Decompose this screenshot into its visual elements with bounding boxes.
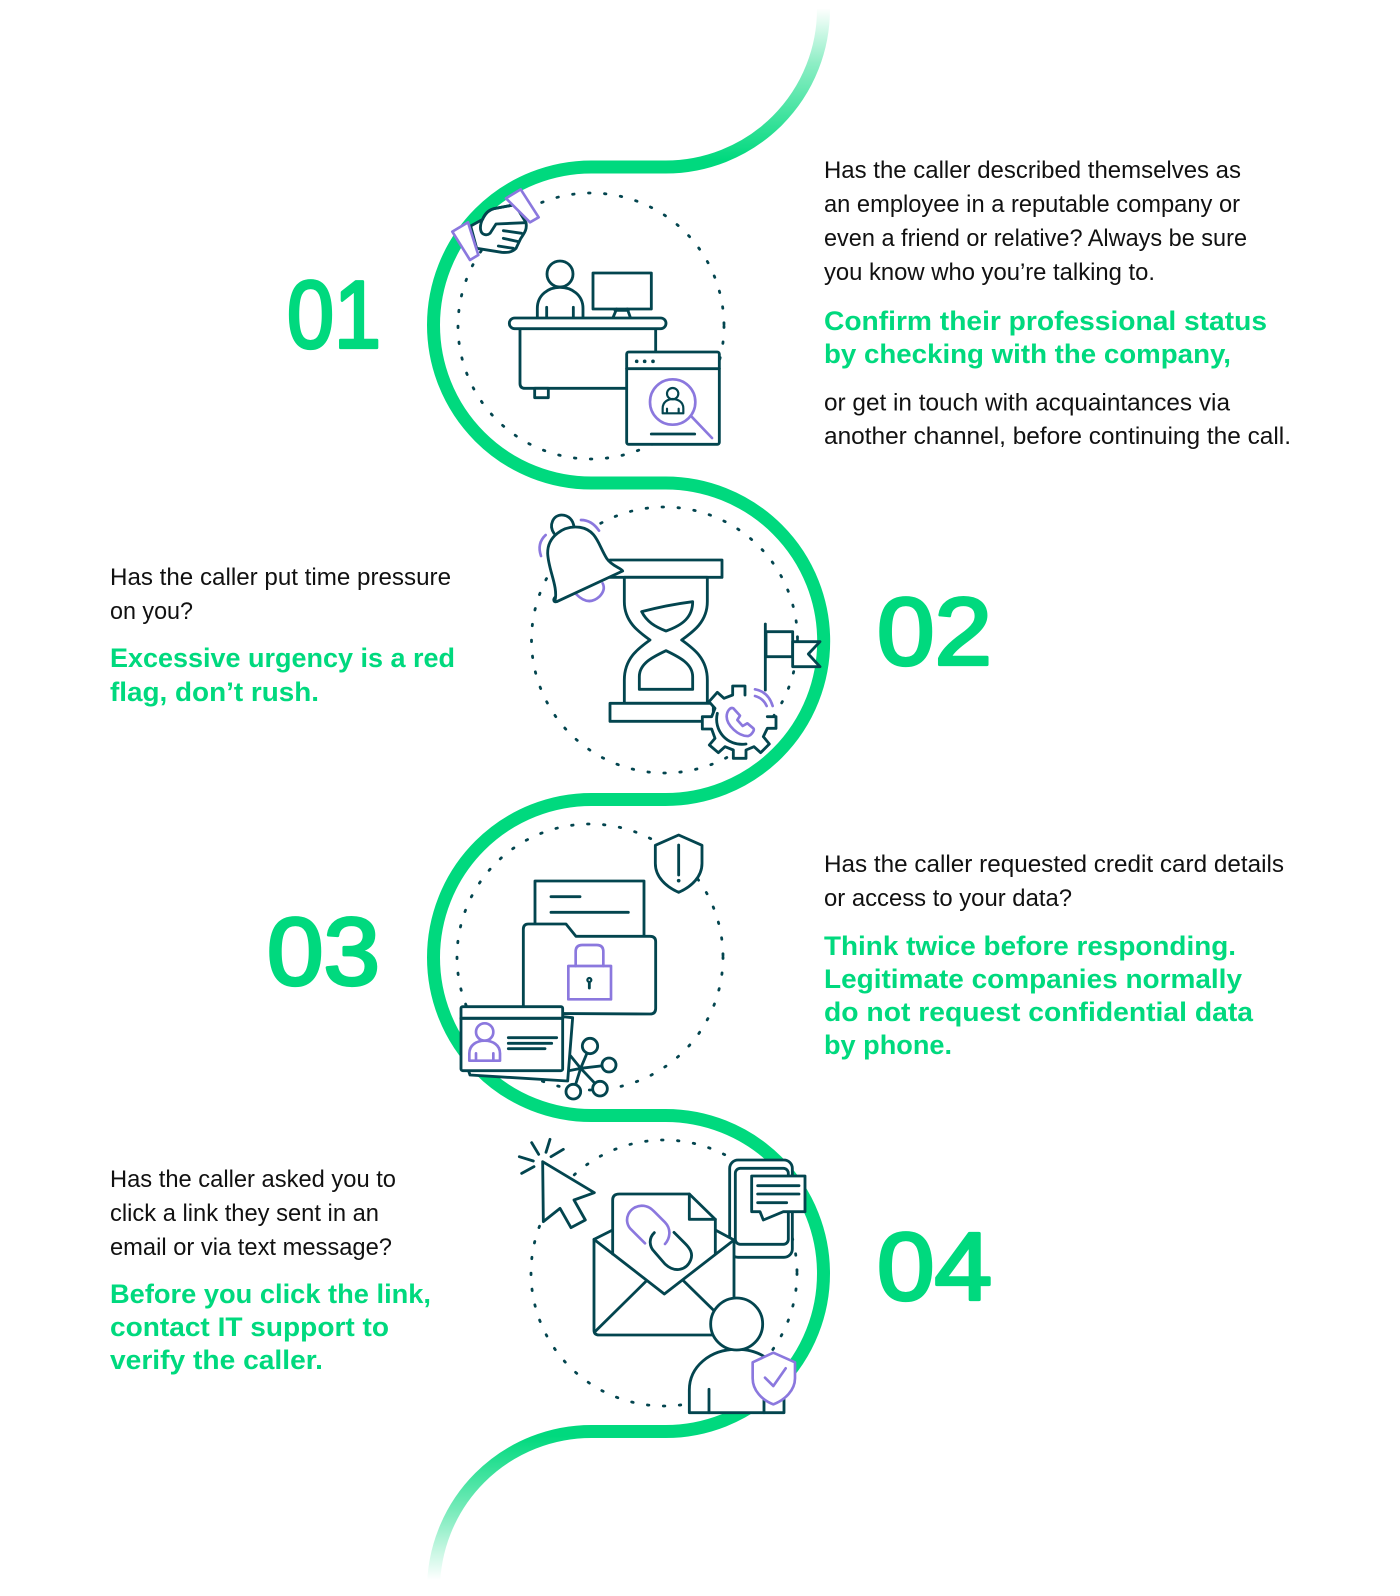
text block 2: Excessive urgency is a red — [110, 643, 455, 673]
icon: flag — [765, 624, 820, 690]
icon: envelope with linked document — [594, 1194, 734, 1335]
text block 1: you know who you’re talking to. — [824, 259, 1155, 286]
icon: clicking cursor — [519, 1139, 594, 1228]
text block 4: Has the caller asked you to — [110, 1166, 396, 1193]
text block 1: another channel, before continuing the call. — [824, 423, 1291, 450]
text block 3: Has the caller requested credit card details — [824, 851, 1284, 878]
text block 4: contact IT support to — [110, 1312, 389, 1342]
text block 3: Legitimate companies normally — [824, 964, 1242, 994]
text block 1: Has the caller described themselves as — [824, 157, 1241, 184]
winding green path — [434, 9, 824, 1590]
icon: phone with message — [730, 1160, 805, 1257]
icon: alarm bell — [540, 515, 623, 602]
text block 4: email or via text message? — [110, 1234, 392, 1261]
icon: id cards — [461, 1007, 573, 1081]
text block 2 — [110, 564, 455, 707]
text block 1: even a friend or relative? Always be sure — [824, 225, 1247, 252]
icon: network nodes — [566, 1038, 616, 1099]
text block 1 — [824, 157, 1291, 450]
icon: locked folder with document — [523, 881, 656, 1014]
text block 4 — [110, 1166, 431, 1375]
icon group 4: cursor, email, phone, person — [519, 1139, 805, 1413]
text block 4: click a link they sent in an — [110, 1200, 379, 1227]
text block 2: Has the caller put time pressure — [110, 564, 451, 591]
text block 1: an employee in a reputable company or — [824, 191, 1240, 218]
icon: phone gear — [702, 686, 776, 758]
dashed circle 3 — [457, 824, 723, 1090]
icon group 1: receptionist, handshake, profile search — [452, 189, 719, 444]
text block 4: Before you click the link, — [110, 1279, 431, 1309]
text block 1: Confirm their professional status — [824, 306, 1267, 336]
icon: person with check shield — [689, 1298, 795, 1413]
icon: person at desk with monitor — [509, 261, 666, 398]
text block 1: or get in touch with acquaintances via — [824, 390, 1231, 416]
text block 2: on you? — [110, 598, 193, 625]
text block 1: by checking with the company, — [824, 339, 1231, 369]
icon: warning shield — [655, 835, 702, 892]
number 02: 02 — [877, 578, 992, 686]
dashed circle 1 — [458, 193, 724, 459]
icon group 3: folder, shield, id cards, network — [461, 835, 702, 1099]
text block 2: flag, don’t rush. — [110, 677, 319, 707]
text block 3 — [824, 851, 1284, 1060]
icon: browser profile search — [627, 352, 719, 444]
dashed circle 2 — [532, 507, 798, 773]
dashed circle 4 — [531, 1140, 797, 1406]
icon: hourglass — [610, 560, 722, 721]
icon: handshake — [452, 189, 539, 260]
number 01: 01 — [287, 262, 381, 368]
text block 4: verify the caller. — [110, 1345, 323, 1375]
text block 3: Think twice before responding. — [824, 931, 1236, 961]
number 03: 03 — [267, 898, 380, 1006]
text block 3: or access to your data? — [824, 885, 1072, 912]
text block 3: do not request confidential data — [824, 997, 1254, 1027]
text block 3: by phone. — [824, 1030, 952, 1060]
icon group 2: hourglass, bell, flag, phone gear — [540, 515, 820, 758]
number 04: 04 — [877, 1214, 992, 1320]
